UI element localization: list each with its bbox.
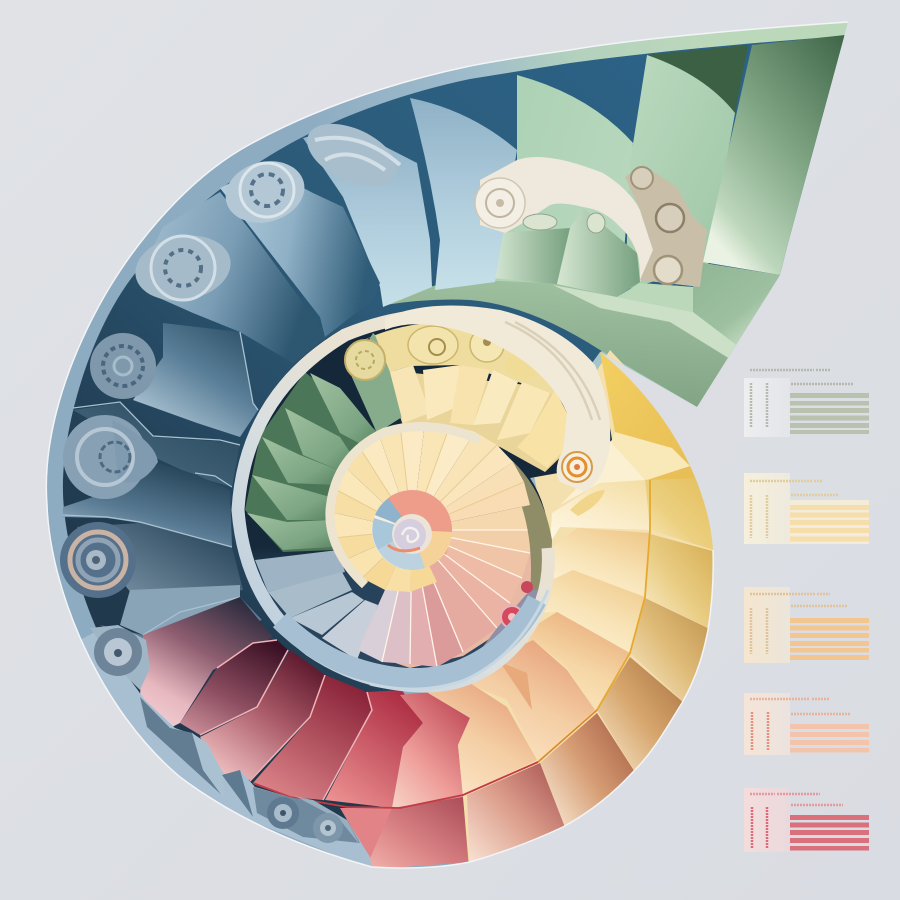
red fins — [140, 597, 470, 870]
legend panel: yellow — [744, 473, 869, 544]
yellow scroll band — [345, 322, 557, 395]
blue middle fins — [255, 550, 378, 660]
green floor band — [385, 263, 780, 407]
green middle fins — [247, 373, 377, 550]
legend panel: orange — [744, 587, 869, 663]
thick cream band and curl — [385, 306, 610, 516]
spiral ring — [238, 315, 548, 689]
scroll ornaments — [60, 111, 406, 598]
legend panel: green — [744, 370, 869, 437]
green fin base — [245, 372, 378, 552]
cream scroll top — [475, 157, 707, 287]
yellow outer bands — [467, 352, 720, 870]
blue fin creases — [63, 332, 258, 635]
mint fins under arch — [496, 212, 640, 297]
green tip section — [470, 35, 845, 300]
cream inner fins — [427, 430, 650, 795]
legend panel: red — [744, 788, 869, 852]
shell seam — [253, 480, 650, 808]
lower fan fins — [358, 505, 535, 668]
yellow middle fins — [390, 365, 567, 468]
inner disc cream fan — [330, 422, 530, 592]
olive band and red swirl — [470, 440, 552, 664]
dark green patch — [350, 333, 403, 433]
cream fins base — [458, 350, 730, 880]
red fin creases — [200, 640, 372, 800]
blue fins top — [63, 98, 517, 650]
spiral core — [372, 490, 452, 570]
yellow fin base — [385, 370, 570, 472]
middle whorl — [232, 310, 612, 692]
legend panel: salmon — [744, 693, 869, 755]
dark interior — [63, 36, 845, 857]
bottom blue rim — [80, 625, 372, 870]
